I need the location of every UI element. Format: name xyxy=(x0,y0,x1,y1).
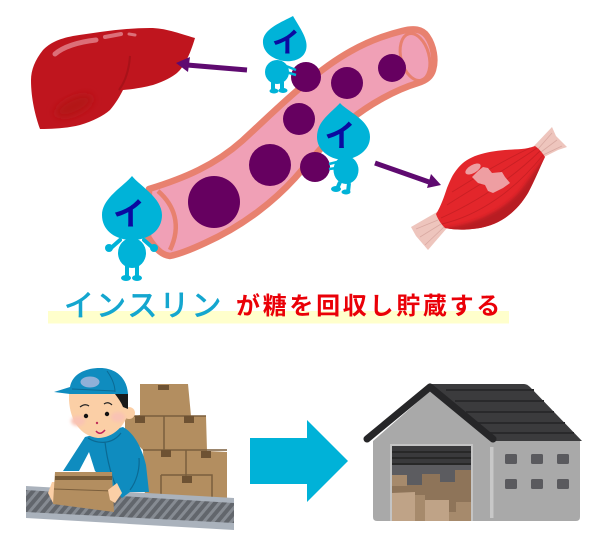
heading: recovers and stores sugar: が糖を回収し貯蔵する xyxy=(236,292,503,320)
stacked boxes xyxy=(125,384,227,498)
character: insulin droplet left: イ xyxy=(113,196,145,232)
warehouse windows xyxy=(505,454,569,489)
warehouse roof xyxy=(367,384,582,441)
warehouse walls xyxy=(373,391,580,521)
character: insulin droplet top xyxy=(263,16,307,94)
heading: insulin: インスリン xyxy=(64,290,223,323)
illustration: worker with boxes on conveyor xyxy=(26,368,234,530)
worker body xyxy=(63,427,149,498)
character: insulin droplet top: イ xyxy=(272,27,300,58)
illustration: warehouse xyxy=(367,384,582,521)
character: insulin droplet right xyxy=(317,103,370,194)
icon: muscle xyxy=(411,127,567,250)
icon: liver xyxy=(31,28,195,129)
arrow: large cyan xyxy=(250,420,348,502)
arrow: to muscle xyxy=(375,163,441,188)
warehouse door xyxy=(390,444,473,521)
arrow: to liver xyxy=(176,57,247,72)
caption highlight band xyxy=(48,311,509,324)
conveyor belt xyxy=(26,486,234,530)
wall drain pipe xyxy=(490,447,494,518)
worker cap xyxy=(54,368,128,394)
character: insulin droplet right: イ xyxy=(324,119,356,154)
glucose molecules xyxy=(188,54,406,228)
held box xyxy=(48,472,122,512)
blood vessel xyxy=(148,29,435,256)
worker head xyxy=(69,393,135,438)
character: insulin droplet left xyxy=(102,176,162,281)
